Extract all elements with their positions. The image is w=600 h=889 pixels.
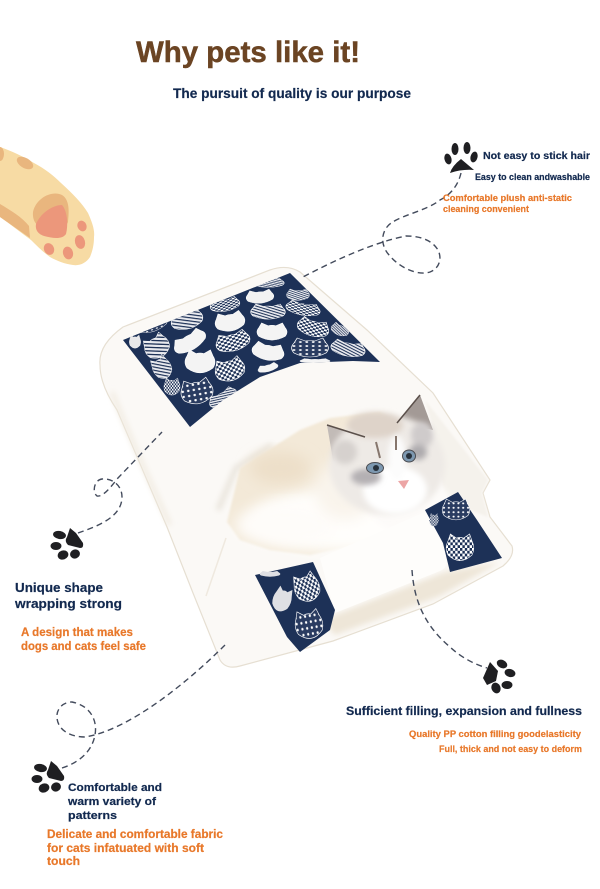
text block: unique shape callout: dogs and cats feel safe xyxy=(21,639,146,653)
text block: patterns callout: for cats infatuated with soft xyxy=(47,843,204,855)
navy pattern panel xyxy=(123,273,380,427)
text block: unique shape callout: Unique shape xyxy=(15,580,103,595)
pillow xyxy=(255,492,502,652)
text block: top right callout: Not easy to stick hair xyxy=(483,151,590,162)
text block: top right callout: Comfortable plush anti-static xyxy=(443,193,572,203)
text block: patterns callout: patterns xyxy=(68,810,117,822)
opening interior xyxy=(227,412,440,555)
text block: filling callout: Sufficient filling, expansion and fullness xyxy=(346,704,582,718)
text block: patterns callout: touch xyxy=(47,856,80,868)
text block: patterns callout xyxy=(47,782,224,868)
text block: filling callout: Quality PP cotton filling goodelasticity xyxy=(409,729,581,739)
text block: unique shape callout xyxy=(14,580,146,653)
dashed path: bottom left xyxy=(57,645,225,768)
product: cat bed xyxy=(100,267,513,667)
text block: patterns callout: Delicate and comfortable fabric xyxy=(47,829,224,841)
dashed path: top right xyxy=(303,173,461,277)
bed white body xyxy=(100,267,513,667)
bed shading xyxy=(112,392,488,596)
text block: filling callout xyxy=(346,704,582,754)
dashed path: left middle xyxy=(78,432,162,533)
subtitle: The pursuit of quality is our purpose xyxy=(173,85,411,101)
text block: patterns callout: Comfortable and xyxy=(68,782,162,794)
icon: paw bottom right xyxy=(483,658,516,695)
text block: filling callout: Full, thick and not easy to deform xyxy=(439,744,582,754)
icon: paw top right xyxy=(443,142,479,173)
text block: top right callout: Easy to clean andwashable xyxy=(475,172,590,182)
icon: paw left middle xyxy=(50,528,83,561)
text block: top right callout: cleaning convenient xyxy=(443,204,529,214)
title: Why pets like it! xyxy=(136,36,360,69)
text block: unique shape callout: A design that makes xyxy=(21,625,133,639)
cat head xyxy=(327,395,445,515)
text block: top right callout xyxy=(443,151,590,214)
cat body fur xyxy=(235,452,452,552)
text block: unique shape callout: wrapping strong xyxy=(14,596,122,611)
dashed path: bottom right xyxy=(412,570,487,668)
text block: patterns callout: warm variety of xyxy=(67,796,156,808)
illustration: cat paw xyxy=(0,147,94,265)
icon: paw bottom left xyxy=(32,761,64,794)
